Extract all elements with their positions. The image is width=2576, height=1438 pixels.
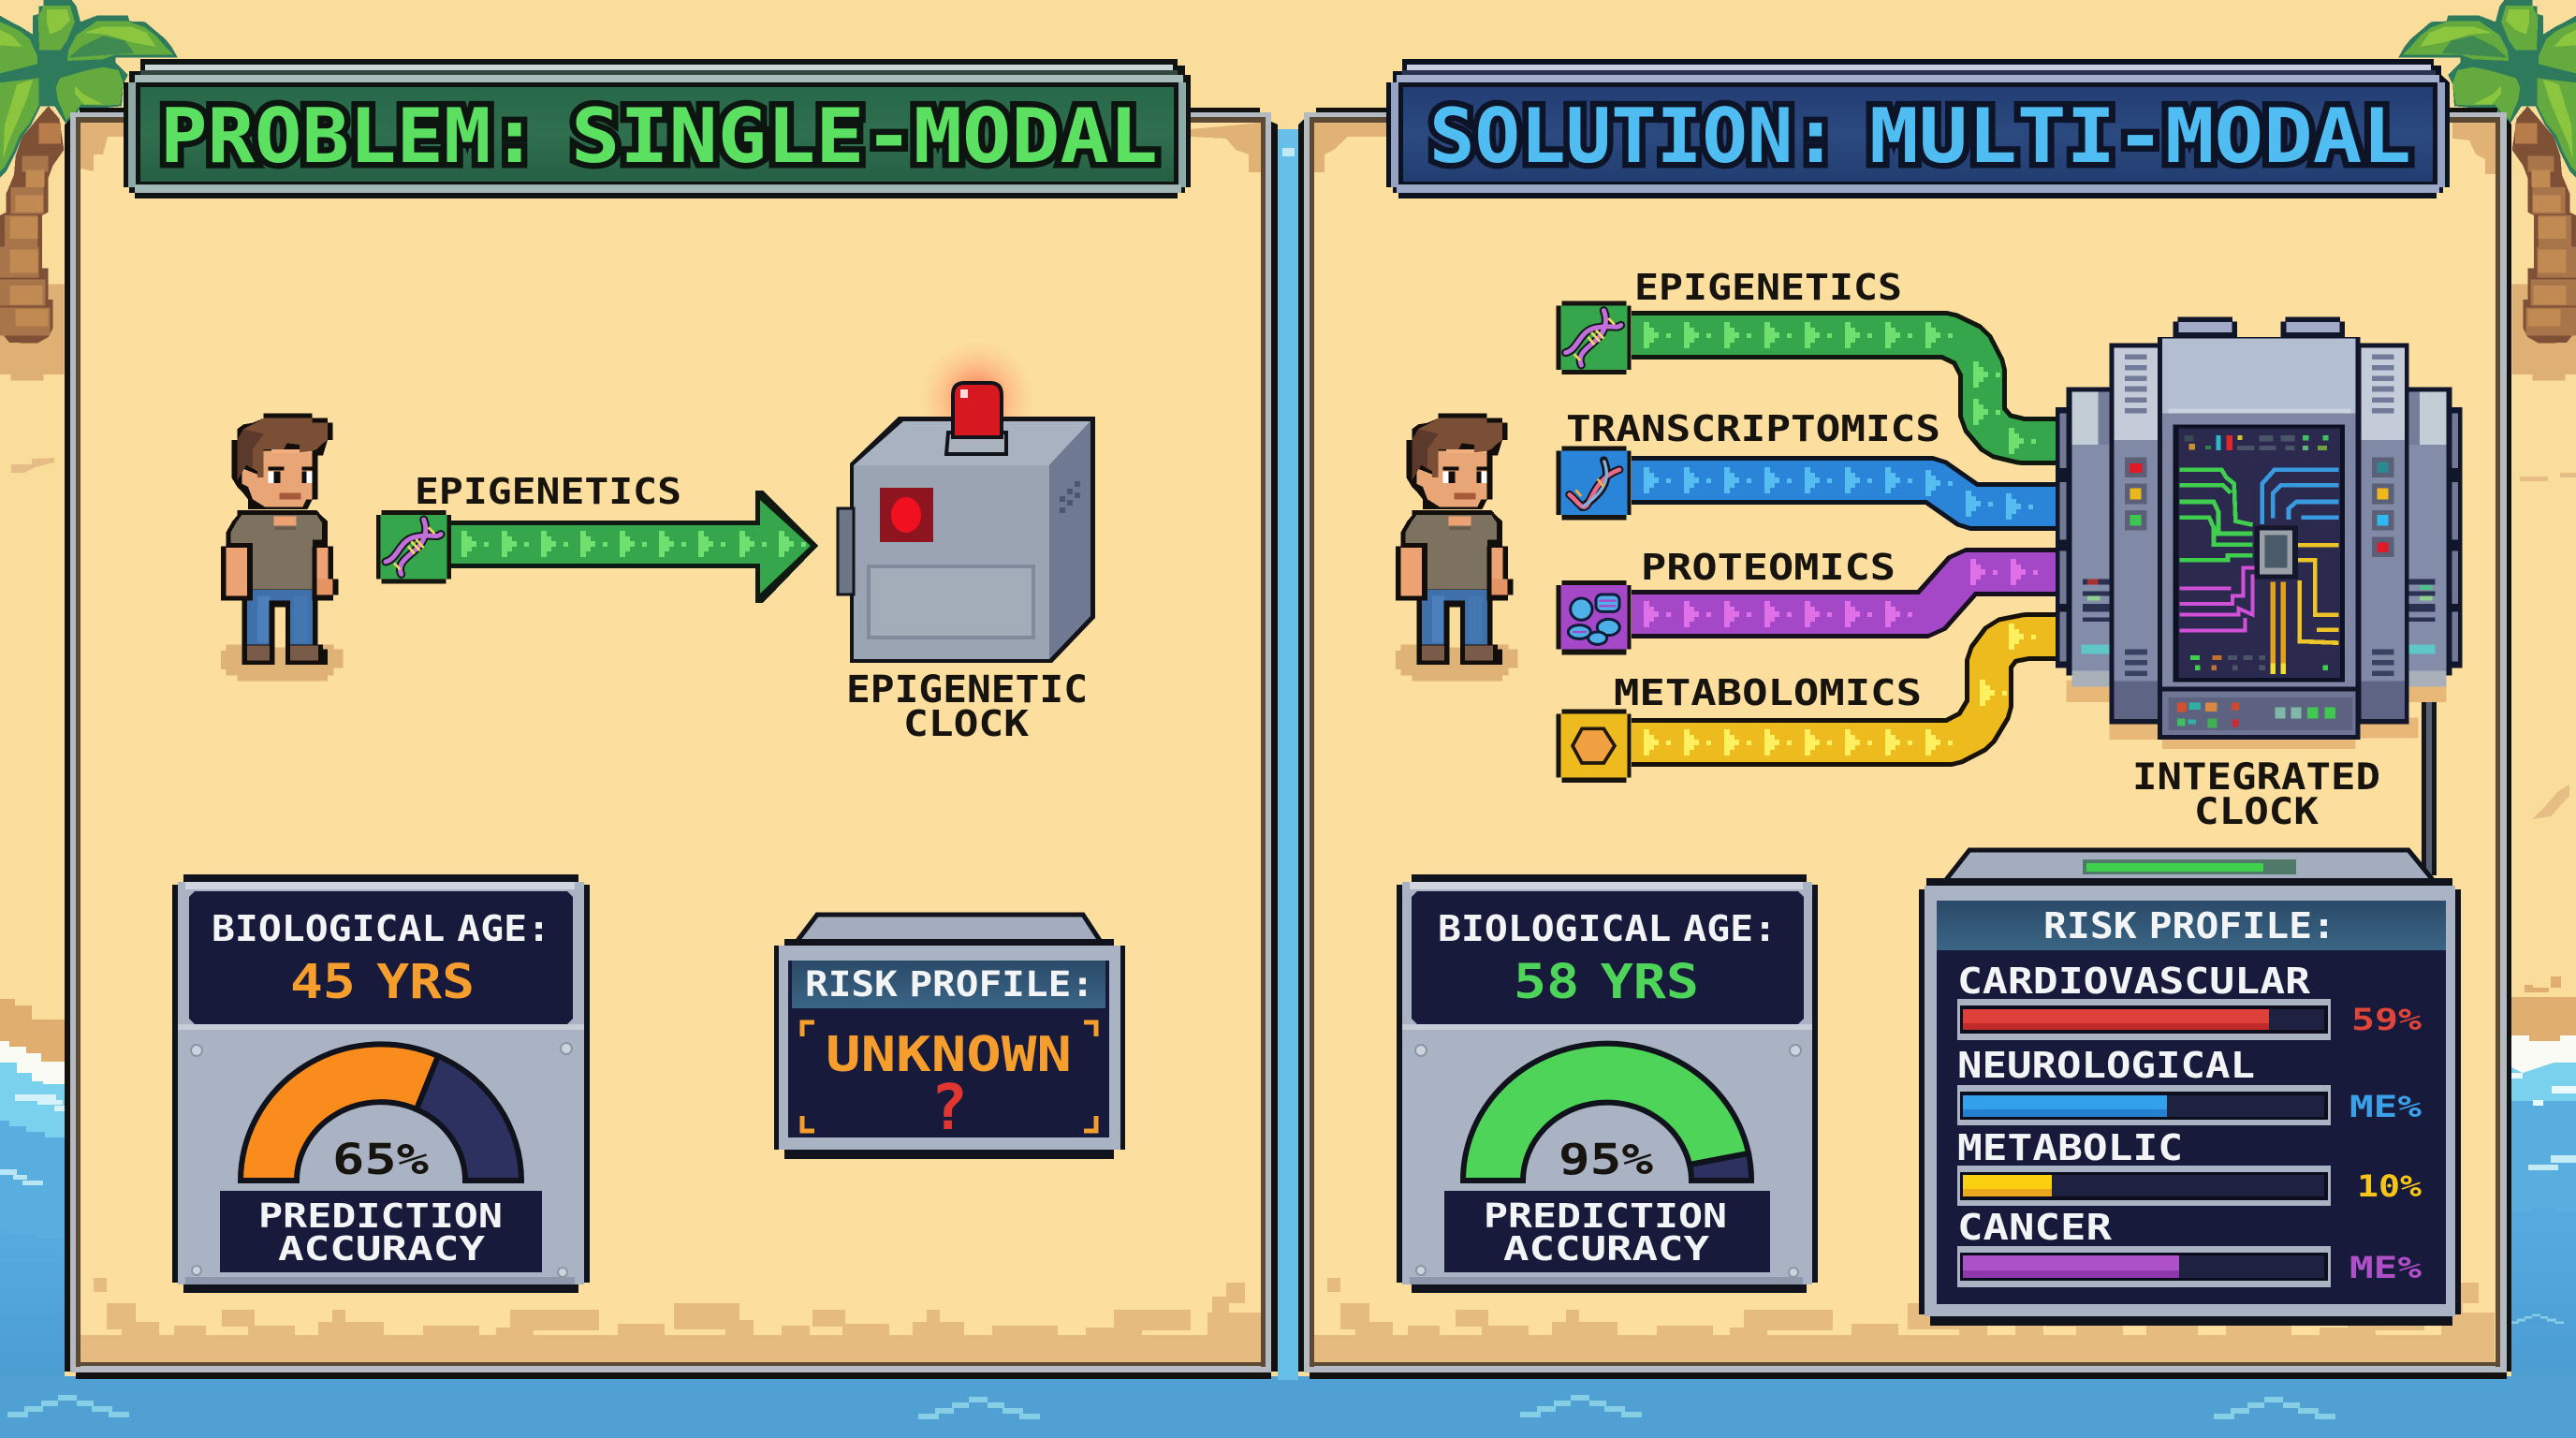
channel highlight [1282,148,1295,156]
heading text: problem [160,93,1158,180]
screws [1415,1045,1801,1277]
row: metabolic: METABOLIC [1957,1127,2183,1168]
heading banner: solution [1386,59,2450,198]
question mark: ? [930,1071,968,1144]
row: metabolic: 10% [2357,1168,2422,1204]
machine center column [2158,337,2361,740]
stream: epigenetics [1632,322,2057,454]
circuit screen [2174,424,2345,682]
card top cap [797,915,1101,942]
caption: epigenetic clock: EPIGENETIC [846,668,1088,712]
biological age readout: BIOLOGICAL AGE: [1438,908,1777,949]
card top cap with meter [1945,850,2434,881]
row: metabolic [1957,1127,2422,1206]
label: epigenetics (solution): EPIGENETICS [1634,267,1902,308]
background: right shore and ocean [2511,976,2576,1438]
risk card: unknown: RISK PROFILE: [805,964,1094,1005]
risk card: unknown [774,915,1125,1159]
row: cardiovascular: 59% [2351,1002,2422,1037]
gauge card: problem: 65% [332,1135,429,1184]
caption: integrated clock: INTEGRATED [2132,756,2380,799]
gauge card: solution: 95% [1559,1135,1653,1184]
row: cardiovascular: CARDIOVASCULAR [1957,961,2310,1002]
prediction accuracy label: PREDICTION [1484,1197,1727,1236]
icon: dna green (solution) [1557,301,1632,374]
siren [946,433,1006,454]
biological age readout [189,891,573,1024]
unknown value: UNKNOWN [826,1027,1072,1083]
character: person (problem) [221,414,344,681]
panel: problem [65,108,1278,1379]
prediction accuracy label: PREDICTION [258,1197,503,1236]
risk card: detailed profile: RISK PROFILE: [2043,905,2335,946]
prediction accuracy label [1444,1191,1770,1272]
central water channel [1278,129,1298,1380]
clock red indicator [880,488,933,542]
heading text: solution: MULTI-MODAL [1869,93,2411,180]
icon: integrated clock machine [2056,316,2463,749]
clock knob [838,508,854,594]
caption: integrated clock: CLOCK [2194,791,2320,833]
corner brackets [802,1022,1096,1131]
heading banner: problem [124,59,1191,198]
clock lower plate [869,566,1033,638]
status lights [2125,457,2393,557]
panel: solution [1298,108,2511,1379]
machine side columns [2109,344,2408,724]
screws [191,1043,572,1277]
machine top caps [2174,321,2237,340]
caption: epigenetic clock: CLOCK [903,703,1029,744]
palm tree: left [0,0,178,381]
caption: integrated clock [2132,756,2380,833]
icon: metabolite yellow [1557,709,1632,783]
risk header [1937,901,2446,950]
character: person (solution) [1396,414,1518,681]
label: proteomics: PROTEOMICS [1641,547,1895,588]
connector cable [2422,688,2437,875]
row: neurological: ME% [2349,1089,2422,1124]
stream: metabolomics [1632,624,2057,756]
background: left shore and ocean [0,999,65,1438]
row: cardiovascular [1957,961,2422,1040]
palm tree: right [2398,0,2576,381]
stream: transcriptomics [1632,467,2057,520]
icon: dna green (problem) [376,510,451,583]
gauge: 95 percent [1463,1044,1751,1181]
central chip [2254,526,2298,579]
label: metabolomics: METABOLOMICS [1614,672,1922,713]
siren glow [919,340,1035,456]
gauge card: problem [172,874,590,1293]
machine control panel [2162,691,2356,735]
heading text: problem: PROBLEM: [160,93,538,180]
heading text: solution [1429,93,2411,180]
gauge: 65 percent [241,1044,521,1181]
row: neurological [1957,1045,2422,1125]
prediction accuracy label: ACCURACY [1503,1230,1709,1269]
stream: proteomics [1632,559,2057,627]
row: neurological: NEUROLOGICAL [1957,1045,2255,1086]
shore marks [11,458,2576,819]
biological age readout [1412,891,1804,1024]
risk card: detailed profile [1919,850,2461,1326]
caption: epigenetic clock [846,668,1088,744]
biological age readout: 58 YRS [1514,955,1699,1010]
data stream arrow: epigenetics to clock [446,491,818,603]
row: cancer: CANCER [1957,1207,2112,1248]
label: epigenetics (problem): EPIGENETICS [415,471,681,512]
icon: epigenetic clock machine [838,340,1095,663]
prediction accuracy label: ACCURACY [278,1230,485,1269]
icon: rna blue [1557,447,1632,521]
bottom ocean band [0,1376,2576,1438]
machine wings [2056,407,2463,668]
icon: protein purple [1557,580,1632,654]
wave chevrons [7,1120,2564,1419]
gauge card: solution [1397,874,1818,1293]
biological age readout: 45 YRS [290,955,475,1010]
row: cancer [1957,1207,2422,1287]
risk header [792,961,1105,1008]
heading text: problem: SINGLE-MODAL [571,93,1158,180]
prediction accuracy label [220,1191,542,1272]
heading text: solution: SOLUTION: [1429,93,1838,180]
row: cancer: ME% [2349,1250,2422,1285]
biological age readout: BIOLOGICAL AGE: [212,908,550,949]
label: transcriptomics: TRANSCRIPTOMICS [1566,408,1940,449]
